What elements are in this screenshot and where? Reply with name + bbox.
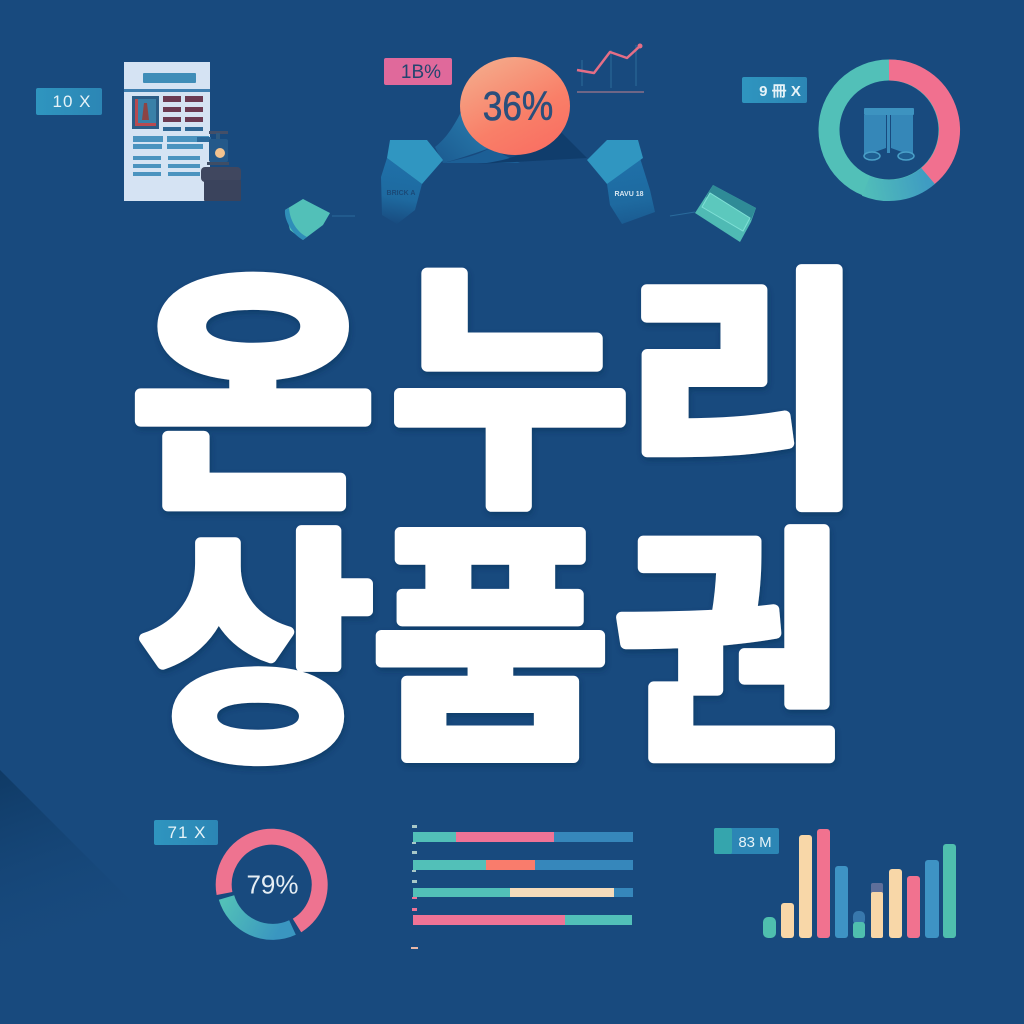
- bar row 2: [413, 860, 633, 870]
- donut chart: 79%: 79%: [246, 870, 299, 900]
- tag: 9 X: 9 冊 X: [759, 83, 801, 100]
- panel: left folded ribbon: BRICK A: [387, 190, 415, 197]
- title line 2: 품: [371, 510, 610, 792]
- title line 1: 온: [130, 254, 377, 542]
- tag: 18%: 1B%: [401, 62, 441, 83]
- tag: 10 X: [36, 88, 102, 115]
- tag: 18%: [384, 58, 452, 85]
- tag: 71 X: 71 X: [168, 823, 206, 842]
- title line 2: 상: [138, 513, 375, 792]
- axis tick labels: [411, 825, 418, 949]
- callout circle: 36%: [460, 57, 570, 155]
- arc connector with folded panels: [381, 110, 655, 224]
- icon: teal banknote wallet: [670, 185, 756, 242]
- tag: 71 X: [154, 820, 218, 845]
- tag: 10 X: 10 X: [53, 92, 91, 111]
- bar row 1: [413, 832, 633, 842]
- tag: 83 M: 83 M: [738, 834, 772, 851]
- panel: right folded ribbon: RAVU 18: [614, 191, 644, 198]
- main title: 온누리 상품권: [130, 244, 865, 793]
- line chart: [577, 44, 644, 92]
- panel: right folded ribbon: [587, 140, 655, 224]
- stacked bar chart: [411, 825, 633, 949]
- title line 2: 권: [613, 513, 848, 793]
- icon: trousers: [864, 108, 914, 160]
- bar chart: [763, 829, 956, 938]
- title line 2: [138, 510, 848, 793]
- panel: left folded ribbon: [381, 140, 443, 224]
- tag: 9 X: [742, 77, 807, 103]
- donut chart with icon: [829, 70, 949, 191]
- decorative corner shadow: [0, 770, 180, 950]
- title line 1: 누: [389, 244, 631, 539]
- bar row 4: [413, 915, 632, 925]
- title line 1: [130, 244, 865, 542]
- donut chart: 79%: [224, 837, 320, 932]
- icon: document with lantern: [124, 62, 241, 201]
- callout circle: 36%: 36%: [483, 84, 553, 130]
- tag: 83 M: [714, 828, 779, 854]
- icon: teal rolled ticket: [285, 199, 355, 240]
- title line 1: 리: [623, 253, 865, 538]
- bar row 3: [413, 888, 633, 897]
